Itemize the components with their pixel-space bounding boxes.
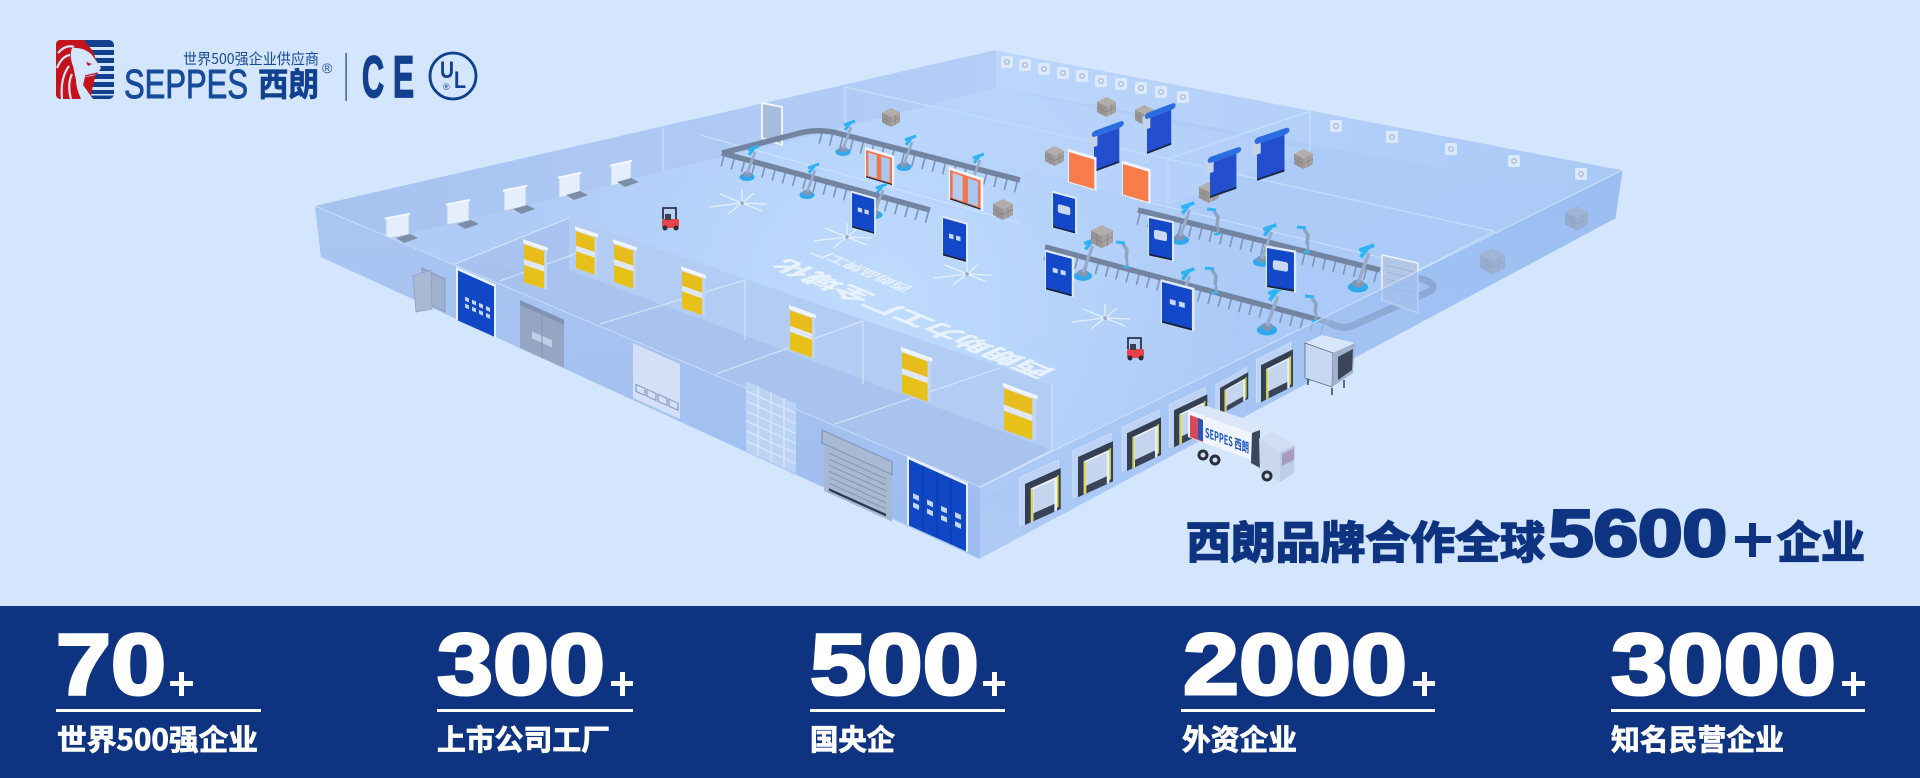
floor light glow: [388, 88, 1600, 500]
logo tagline: 世界500强企业供应商: [183, 48, 319, 69]
headline: partner count: 5600: [1549, 496, 1727, 570]
gray side door: [413, 268, 445, 312]
spiral fast door: [822, 430, 892, 522]
factory floor: [315, 50, 1623, 559]
registered mark: ®: [322, 60, 333, 76]
glass grid door: [746, 381, 796, 474]
stat: central SOEs: 500: [810, 617, 979, 713]
icon: UL mark: L: [454, 67, 466, 94]
room back wall: [569, 218, 1052, 450]
stat: foreign enterprises: 2000: [1183, 617, 1407, 713]
floor lettering: 西朗品牌工厂: [805, 246, 917, 294]
delivery truck: [1188, 406, 1295, 482]
room left wall: [455, 218, 569, 290]
inner blue doors: [851, 191, 1296, 332]
dock levelers: [1020, 341, 1293, 527]
dock machine cabinet: [1305, 335, 1355, 395]
stat: listed factories: [437, 617, 633, 759]
cardboard box stacks: [882, 97, 1588, 274]
air units: [1001, 56, 1587, 180]
front left wall rim: [315, 206, 980, 487]
stat: Fortune 500: 70: [56, 617, 166, 713]
back right wall: [996, 50, 1623, 196]
robot arms: [740, 121, 1374, 335]
background: [0, 0, 1920, 606]
stat: central SOEs: 国央企: [810, 717, 895, 759]
room partitions: [455, 218, 1052, 487]
panel: factory floor plan: [315, 50, 1623, 559]
logo chinese name: 西朗: [258, 58, 319, 106]
yellow fast doors: [523, 226, 1038, 442]
logo wordmark: SEPPES: [124, 61, 248, 107]
stat: central SOEs: [810, 617, 1005, 759]
interior partition walls: [663, 87, 1494, 290]
icon: UL mark: U: [440, 57, 454, 84]
front left wall: [315, 206, 980, 558]
icon: lion mark: [56, 40, 114, 99]
blue door with windows: [456, 267, 496, 338]
icon: UL mark: ®: [443, 82, 450, 92]
white sectional door: [633, 343, 680, 419]
room floors: [455, 264, 1052, 487]
floor fans: [709, 189, 1130, 329]
stat: listed factories: 300: [437, 617, 605, 713]
stat: Fortune 500: 世界500强企业: [57, 717, 258, 759]
back high-speed blue doors: [1089, 102, 1290, 200]
front right wall: [980, 170, 1623, 558]
far room tinted floor: [845, 88, 1310, 205]
stat: private enterprises: 3000: [1611, 617, 1836, 713]
icon: UL mark: [430, 53, 476, 99]
divider: [346, 53, 347, 101]
icon: CE mark: C: [362, 45, 384, 110]
large blue door: [907, 456, 968, 552]
conveyor lines: [722, 131, 1433, 329]
stat: private enterprises: 知名民营企业: [1611, 717, 1784, 759]
stat: foreign enterprises: [1181, 617, 1435, 759]
conveyor gate: [1382, 255, 1418, 313]
small loading doors on back wall: [385, 103, 782, 243]
headline: partner count: [1186, 496, 1865, 571]
front right wall rim: [980, 50, 1623, 487]
back left wall: [315, 50, 996, 239]
logo: SEPPES: [56, 40, 333, 107]
forklifts: [662, 208, 1144, 360]
orange doors: [865, 147, 1150, 211]
headline: partner count: 企业: [1777, 507, 1865, 571]
stat: private enterprises: [1611, 617, 1865, 759]
gray sliding door: [520, 300, 564, 368]
stat: foreign enterprises: 外资企业: [1182, 717, 1297, 759]
floor lettering: 西朗助力工厂全域化: [761, 255, 1062, 384]
panel: statistics band: [0, 606, 1920, 778]
headline: partner count: 西朗品牌合作全球: [1186, 507, 1545, 571]
stat: Fortune 500: [56, 617, 261, 759]
truck livery text: SEPPES 西朗: [1205, 421, 1249, 457]
icon: CE mark: E: [393, 45, 414, 110]
stat: listed factories: 上市公司工厂: [437, 717, 610, 759]
